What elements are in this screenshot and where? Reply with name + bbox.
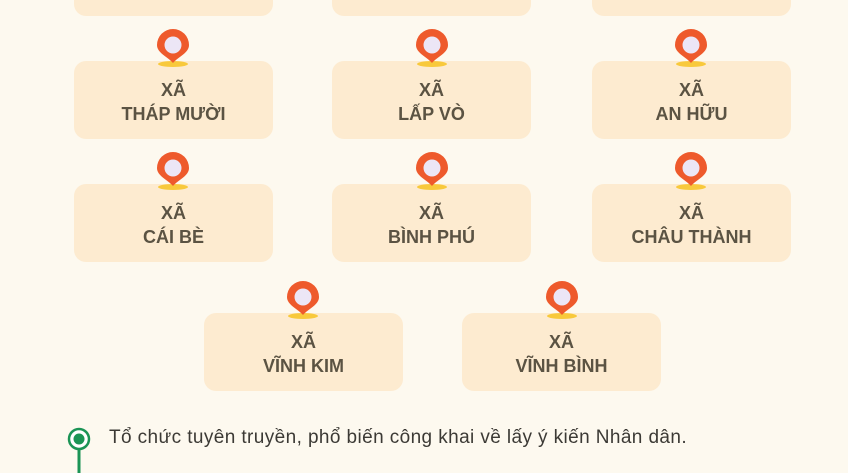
box: An Hữu: XÃ (679, 80, 704, 100)
icon: green bullet (68, 428, 90, 473)
box: Tháp Mười (74, 61, 273, 139)
text: step: Tổ chức tuyên truyền, phổ biến công khai về lấy ý kiến Nhân dân. (109, 427, 687, 448)
panel: row 3 (204, 313, 661, 391)
box: Lấp Vò: LẤP VÒ (398, 104, 465, 124)
box: Cái Bè: CÁI BÈ (143, 227, 204, 247)
box: An Hữu: AN HỮU (656, 104, 727, 124)
box: Cái Bè: XÃ (161, 203, 186, 223)
box: Châu Thành: CHÂU THÀNH (632, 227, 752, 247)
box: Lấp Vò (332, 61, 531, 139)
box: Tháp Mười: XÃ (161, 80, 186, 100)
box: Châu Thành (592, 184, 791, 262)
box: Bình Phú (332, 184, 531, 262)
box: Vĩnh Kim: VĨNH KIM (263, 356, 344, 376)
box: Bình Phú: XÃ (419, 203, 444, 223)
box: Bình Phú: BÌNH PHÚ (388, 227, 475, 247)
top partial boxes (74, 0, 791, 16)
box: Châu Thành: XÃ (679, 203, 704, 223)
panel: row 2 (74, 184, 791, 262)
box: Cái Bè (74, 184, 273, 262)
box: An Hữu (592, 61, 791, 139)
panel: row 1 (74, 61, 791, 139)
box: Vĩnh Kim (204, 313, 403, 391)
box: Vĩnh Bình (462, 313, 661, 391)
box: Vĩnh Bình: VĨNH BÌNH (515, 356, 608, 376)
box: Lấp Vò: XÃ (419, 80, 444, 100)
box: Vĩnh Bình: XÃ (549, 332, 574, 352)
box: Tháp Mười: THÁP MƯỜI (122, 104, 225, 124)
box: Vĩnh Kim: XÃ (291, 332, 316, 352)
